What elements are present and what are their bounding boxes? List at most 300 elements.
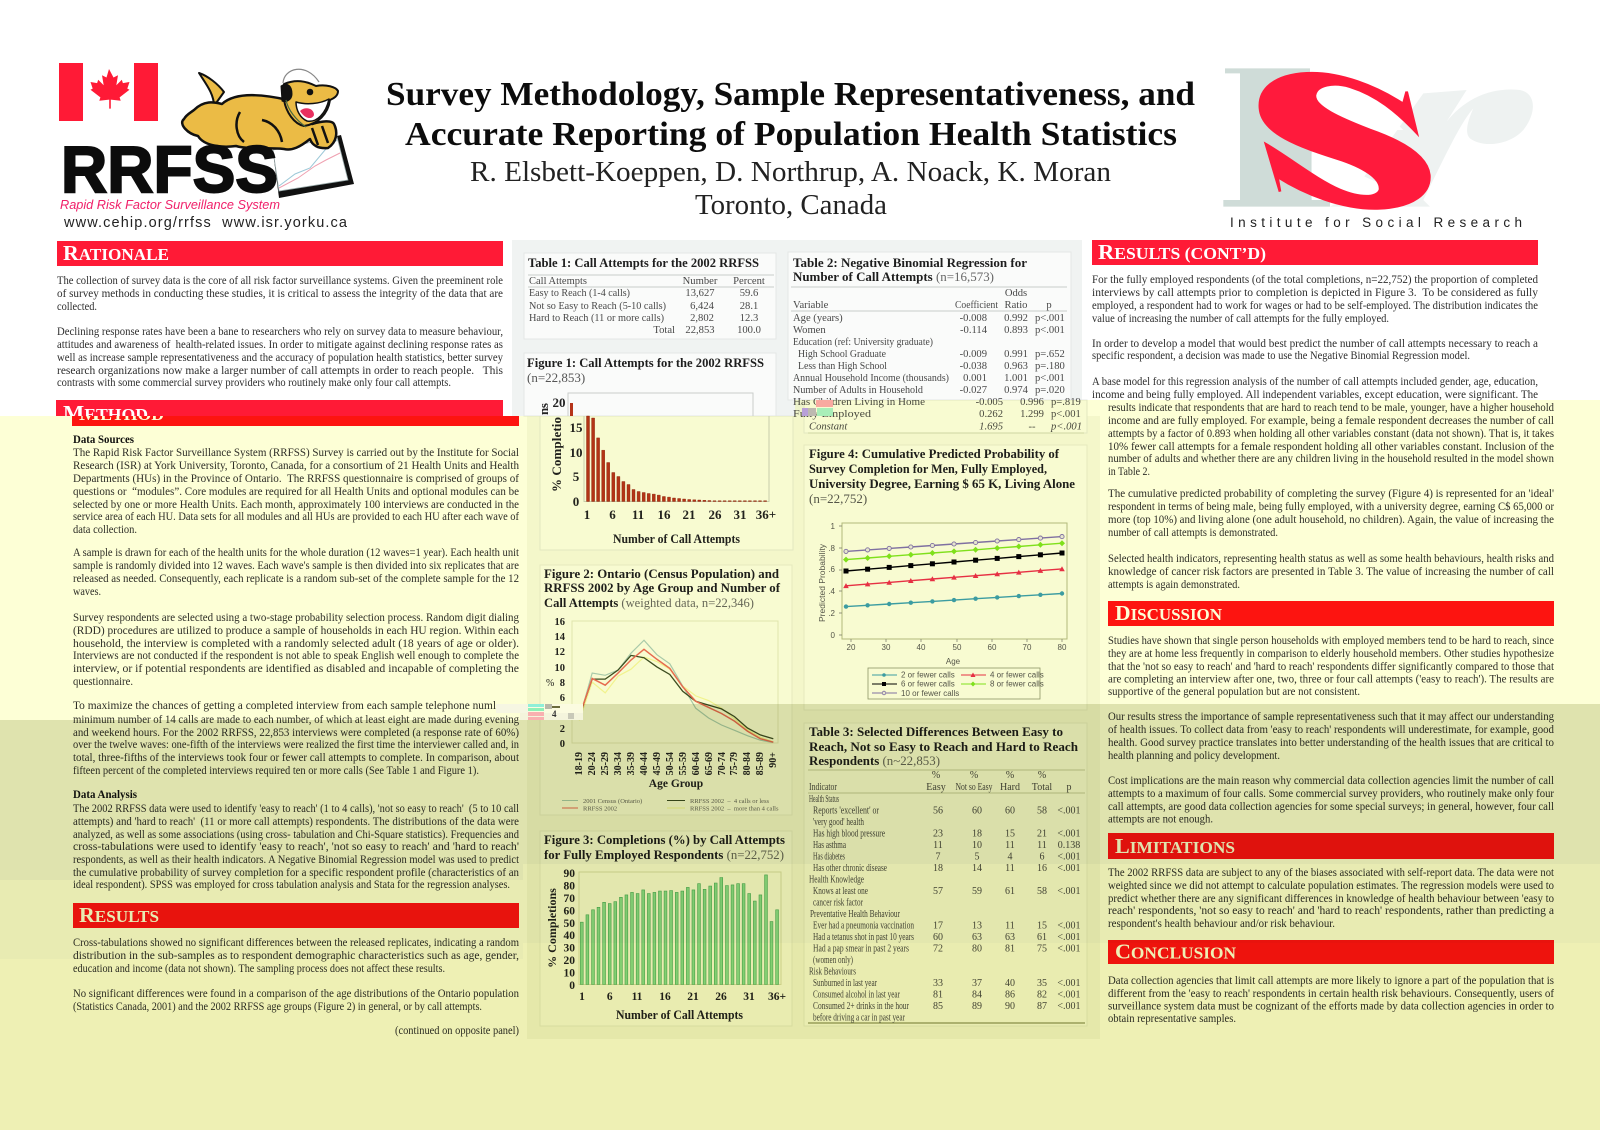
bar chart: call attempts: 5 <box>573 469 580 484</box>
figure 4 title: Survey Completion for Men, Fully Employed, <box>809 461 1047 476</box>
text block: results continued: in Table 2. <box>1108 466 1150 478</box>
table 3 data: Has diabetes <box>813 852 845 862</box>
table 2 subtitle: Number of Call Attempts (n=16,573) <box>793 269 994 284</box>
text block: results continued: specific respondent, a decision was made to use the Negative Binomial Regression model. <box>1092 350 1470 362</box>
line chart: predicted probability by age: 20 <box>847 643 856 652</box>
table 3 data: 85 <box>933 1001 943 1012</box>
text block: results continued: number of call attempts is demonstrated. <box>1108 527 1278 539</box>
chart legend: 6 or fewer calls <box>901 680 955 688</box>
table 3 data: 72 <box>933 944 943 954</box>
panel: center background, lower <box>527 416 1100 1039</box>
table 3 data: 10 <box>972 840 982 851</box>
table 3 data: <.001 <box>1057 886 1081 897</box>
heading: results continued: RESULTS (CONT’D) <box>1098 240 1266 264</box>
table 3 data: 58 <box>1037 806 1047 816</box>
bar chart: completions: 11 <box>632 991 643 1003</box>
chart legend <box>868 668 1044 699</box>
heading: rationale: RATIONALE <box>63 241 169 265</box>
bar chart: call attempts: 15 <box>570 420 583 435</box>
table 3 title: Reach, Not so Easy to Reach and Hard to Reach <box>809 739 1079 754</box>
bar chart: call attempts <box>536 393 776 546</box>
text block: discussion: attempts to a maximum of four calls. Some commercial survey providers, who routinely make only four <box>1108 788 1554 800</box>
heading: rationale <box>57 241 503 266</box>
text block: results continued: employed, a respondent had to work for wages or had to be self-employed. The distribution indicates the <box>1092 300 1538 312</box>
table 3 title: Respondents (n~22,853) <box>809 753 940 768</box>
table 1 data: 22,853 <box>685 325 715 336</box>
text block: results: Cross-tabulations showed no significant differences between the released replicates, indicating a random <box>73 937 519 949</box>
table 3 data: 18 <box>972 828 982 840</box>
table 2 data: 0.974 <box>1004 385 1029 396</box>
chart legend: 8 or fewer calls <box>990 680 1044 688</box>
table 3 data: % <box>932 770 940 781</box>
table 2 data: p<.001 <box>1035 325 1065 336</box>
table 3 data: Consumed alcohol in last year <box>813 990 900 1000</box>
table 3 data: 60 <box>972 806 982 816</box>
line chart: predicted probability by age: Predicted Probability <box>817 543 827 622</box>
text block: limitations: The 2002 RRFSS data are subject to any of the biases associated with self-report data. The data were not <box>1108 867 1555 879</box>
table 3 data: 5 <box>974 852 980 862</box>
text block: results continued: In order to develop a model that would best predict the number of call attempts necessary to reach a <box>1092 338 1538 350</box>
text block: data sources: A sample is drawn for each of the health units for the whole duration (12 waves=1 year). Each health unit <box>73 547 520 559</box>
table 3 title <box>809 724 1079 768</box>
text block: results: distribution in the sub-samples as to respondent demographic characteristics such as age, gender, <box>73 950 519 962</box>
bar chart: completions: 80 <box>564 880 575 892</box>
panel: conclusion <box>1108 940 1554 1025</box>
text block: data sources: total, three-fifths of the interviews took four or fewer call attempts to complete. In comparison, about <box>73 752 520 764</box>
text block: data analysis: ideal respondent). SPSS was employed for cross tabulation analysis and Stata for the regression analyses. <box>73 879 510 891</box>
chart legend: RRFSS 2002 – 4 calls or less <box>690 798 770 805</box>
heading: method: METHOD <box>79 401 164 425</box>
table 3 data: 15 <box>1005 828 1015 840</box>
bar chart: completions: 0 <box>569 980 575 992</box>
table 3 data: before driving a car in past year <box>813 1012 905 1024</box>
table 3 data: Health Status <box>809 794 839 805</box>
chart legend: 2 or fewer calls <box>901 670 955 680</box>
text block: data sources: data collection. <box>73 524 137 536</box>
line chart: age distribution: 50-54 <box>665 752 676 775</box>
figure 4 title: (n=22,752) <box>809 491 867 506</box>
table 3 data: <.001 <box>1057 944 1081 954</box>
panel: figure 1 <box>524 353 793 550</box>
table 1 data: 2,802 <box>690 313 714 324</box>
table 3 data: Consumed 2+ drinks in the hour <box>813 1001 909 1012</box>
table 2 data: Variable <box>793 300 829 311</box>
table 3 data: % <box>1006 770 1014 781</box>
chart legend: RRFSS 2002 <box>583 806 617 812</box>
icon: dog mascot <box>182 69 338 150</box>
table 1 data: 13,627 <box>685 288 715 299</box>
table 3 data: <.001 <box>1057 990 1081 1000</box>
line chart: age distribution: 6 <box>560 693 565 704</box>
text block: data sources: questionnaire. <box>73 676 133 688</box>
line chart: age distribution <box>546 617 779 812</box>
text block: data sources: To maximize the chances of getting a completed interview from each sample telephone numl <box>73 700 496 712</box>
line chart: predicted probability by age: .2 <box>828 609 836 618</box>
table 1 data: 12.3 <box>740 313 758 324</box>
bar chart: call attempts: 26 <box>708 507 722 522</box>
bar chart: completions: 20 <box>564 955 575 967</box>
table 3 data: 35 <box>1037 978 1047 989</box>
text block: discussion: that the 'not so easy to reach' and 'hard to reach' respondents differ significantly compared to those that <box>1108 661 1555 673</box>
table 3 data: 11 <box>1005 863 1015 874</box>
heading: discussion: DISCUSSION <box>1115 601 1222 625</box>
text block: conclusion <box>1108 975 1554 1025</box>
line chart: predicted probability by age: 40 <box>917 643 926 652</box>
bar chart: completions: 6 <box>607 991 613 1003</box>
table 2 data: -0.038 <box>960 361 987 372</box>
text block: results continued: Selected health indicators, representing health status as well as some health behaviours, health risks and <box>1108 553 1554 565</box>
line chart: age distribution: 60-64 <box>691 752 702 775</box>
table 3 data: 80 <box>972 944 982 954</box>
table 2 data: 0.893 <box>1004 325 1028 336</box>
logo tagline: Rapid Risk Factor Surveillance System <box>60 197 280 212</box>
text block: discussion: call attempts, are good data collection agencies for some special surveys; in general, however, four call <box>1108 801 1554 813</box>
line chart: predicted probability by age <box>817 522 1067 699</box>
title <box>386 76 1195 153</box>
bar chart: call attempts: 36+ <box>756 507 776 522</box>
text block: limitations: predict whether there are any significant differences in knowledge of health behaviour between 'easy to <box>1108 893 1554 905</box>
table 2 data: p=.652 <box>1035 349 1065 360</box>
text block: discussion: of health issues. To collect data from 'easy to reach' respondents will underestimate, for example, good <box>1108 724 1554 736</box>
bar chart: call attempts: 11 <box>632 507 644 522</box>
table 3 data: (women only) <box>813 955 853 966</box>
bar chart: completions: 50 <box>564 918 575 930</box>
table 3 title: Table 3: Selected Differences Between Easy to <box>809 724 1063 739</box>
table 3 data: Had a tetanus shot in past 10 years <box>813 932 914 943</box>
bar chart: completions: % Completions <box>545 888 559 968</box>
text block: data sources: Data Sources <box>73 434 135 446</box>
bar chart: completions: 60 <box>564 906 575 918</box>
line chart: predicted probability by age: .4 <box>828 587 836 596</box>
text block: rationale <box>57 275 503 389</box>
panel: center background, upper <box>512 240 1082 416</box>
table 3 data: <.001 <box>1057 978 1081 989</box>
table 2 data: p <box>1046 300 1052 311</box>
panel: limitations <box>1108 833 1555 930</box>
table 3 data: 11 <box>1037 840 1047 851</box>
table 2 data: -0.114 <box>960 325 988 336</box>
table 3 data: 63 <box>1005 932 1015 943</box>
figure 3 title: for Fully Employed Respondents (n=22,752) <box>544 847 784 862</box>
line chart: age distribution: 40-44 <box>639 752 650 775</box>
table 1 data: Call Attempts <box>529 276 587 287</box>
bar chart: call attempts: 1 <box>584 507 590 522</box>
panel: method <box>56 400 520 891</box>
logo: RRFSS with Canadian flag and dog <box>59 63 354 231</box>
panel: rationale <box>57 241 503 389</box>
line chart: predicted probability by age: 80 <box>1058 643 1067 652</box>
figure 2 title: RRFSS 2002 by Age Group and Number of <box>544 580 781 595</box>
figure 2 title <box>544 566 781 610</box>
table 3 data: Reports 'excellent' or <box>813 806 880 816</box>
line chart: age distribution: 20-24 <box>587 752 598 775</box>
panel: figure 4 <box>804 445 1087 710</box>
line chart: age distribution: 2 <box>560 724 565 735</box>
line chart: age distribution: 18-19 <box>574 752 585 775</box>
line chart: age distribution: 8 <box>560 678 565 689</box>
table 2 data: p<.001 <box>1035 313 1065 324</box>
table 1 data: 59.6 <box>740 288 758 299</box>
text block: data sources: Survey respondents are selected using a two-stage probability selection process. Random digit dialing <box>73 612 519 624</box>
table 3 data: cancer risk factor <box>813 898 863 908</box>
table 2 data: 0.991 <box>1004 349 1028 360</box>
bar chart: completions: 40 <box>564 930 575 942</box>
text block: results continued: income and are fully employed. For example, being a female respondent decreases the number of call <box>1108 415 1554 427</box>
table 3 data: <.001 <box>1057 920 1081 932</box>
table 3 data: 7 <box>936 852 940 862</box>
line chart: age distribution: 70-74 <box>717 752 728 775</box>
text block: rationale: of survey methods in conducting these studies, it is critical to assess the integrity of the data that are <box>57 288 503 300</box>
text block: results continued: attempts by a factor of 0.893 when holding all other variables constant (data not shown). That is, it takes <box>1108 428 1554 440</box>
table 3 data: Risk Behaviours <box>809 966 856 978</box>
text block: results continued <box>1092 274 1554 591</box>
bar chart: call attempts: 0 <box>573 494 579 509</box>
heading: results <box>73 903 519 928</box>
text block: discussion: Cost implications are the main reason why commercial data collection agencies limit the number of call <box>1108 775 1554 787</box>
authors and location: Toronto, Canada <box>695 189 887 221</box>
table 2 data: 0.001 <box>963 373 987 384</box>
heading: results continued <box>1092 240 1538 265</box>
table 3 data: 86 <box>1005 990 1015 1000</box>
table 2 data: -0.008 <box>960 313 987 324</box>
text block: data sources: sample is randomly divided into 12 waves. Each wave's sample is then divided into six replicates that are <box>73 560 519 572</box>
table 3 data: 13 <box>972 920 982 932</box>
text block: limitations <box>1108 867 1555 930</box>
line chart: predicted probability by age: 70 <box>1023 643 1032 652</box>
title: Survey Methodology, Sample Representativeness, and <box>386 76 1195 113</box>
table 2 data: p<.001 <box>1051 409 1081 420</box>
figure 2 title: Figure 2: Ontario (Census Population) and <box>544 566 780 581</box>
table 2 data: 1.695 <box>979 422 1003 432</box>
table 1 data: Hard to Reach (11 or more calls) <box>529 313 664 324</box>
table 3 data: Indicator <box>809 782 838 793</box>
table 3 data: 21 <box>1037 828 1047 840</box>
table 1 data: Not so Easy to Reach (5-10 calls) <box>529 301 666 312</box>
chart legend: RRFSS 2002 – more than 4 calls <box>690 806 779 812</box>
line chart: age distribution: % <box>546 678 554 689</box>
table 3 data: 61 <box>1037 932 1047 943</box>
table 2 data: Education (ref: University graduate) <box>793 337 933 348</box>
table 3 data: <.001 <box>1057 852 1081 862</box>
table 3 data: 60 <box>933 932 943 943</box>
table 2 data: -0.027 <box>960 385 987 396</box>
line chart: predicted probability by age: 1 <box>831 522 836 531</box>
text block: rationale: attitudes and awareness of health-related issues. In order to mitigate against declining response rates as <box>57 339 503 351</box>
figure 1 sample size: (n=22,853) <box>527 370 585 385</box>
panel: figure 2 <box>540 565 792 815</box>
text block: results continued: respondent in terms of being male, being fully employed, with a university degree, earning C$ 65,000 or <box>1108 501 1554 513</box>
table 3 data: Has other chronic disease <box>813 863 887 874</box>
table 3 data: <.001 <box>1057 828 1081 840</box>
table 2 title: Table 2: Negative Binomial Regression for <box>793 255 1027 270</box>
table 1 data: Easy to Reach (1-4 calls) <box>529 288 630 299</box>
bar chart: completions: 31 <box>743 991 755 1003</box>
table 3 data: Had a pap smear in past 2 years <box>813 944 909 954</box>
table 3 data: 11 <box>933 840 943 851</box>
table 3 data: 81 <box>1005 944 1015 954</box>
text block: data analysis: The 2002 RRFSS data were used to identify 'easy to reach' (1 to 4 calls), 'not so easy to reach' (5 to 10 call <box>73 803 519 815</box>
line chart: predicted probability by age: 60 <box>988 643 997 652</box>
text block: data analysis: the cumulative probability of survey completion for a specific respondent profile (characteristics of an <box>73 867 519 879</box>
bar chart: call attempts: 6 <box>609 507 616 522</box>
text block: results continued: value of increasing the number of call attempts for the fully employed. <box>1092 313 1389 325</box>
figure 4 title: University Degree, Earning $ 65 K, Living Alone <box>809 476 1075 491</box>
table 3 data: Health Knowledge <box>809 874 864 886</box>
text block: data sources: questions or “modules”. Core modules are required for all Health Units and optional modules can be <box>73 486 519 498</box>
table 3 data: Preventative Health Behaviour <box>810 909 900 920</box>
table 2 data: High School Graduate <box>798 349 886 360</box>
table 2 data <box>791 287 1084 433</box>
bar chart: completions: 10 <box>564 968 575 980</box>
text block: data analysis: cross-tabulations were used to identify 'easy to reach', 'not so easy to reach' and 'hard to reach' <box>73 841 519 853</box>
bar chart: call attempts: ns <box>536 403 551 415</box>
table 3 data: 59 <box>972 886 982 897</box>
website addresses: www.cehip.org/rrfss www.isr.yorku.ca <box>63 215 348 231</box>
heading: discussion <box>1108 601 1554 626</box>
table 3 data: 57 <box>933 886 943 897</box>
chart legend: 10 or fewer calls <box>901 689 959 698</box>
logo wordmark: RRFSS <box>61 132 278 206</box>
text block: results continued: results indicate that respondents that are hard to reach tend to be male, younger, have a higher household <box>1108 402 1554 414</box>
table 2 data: p=.020 <box>1035 385 1065 396</box>
heading: conclusion: CONCLUSION <box>1115 940 1236 964</box>
text block: data analysis: attempts) and 'hard to reach' (11 or more call attempts) respondents. The distributions of the data were <box>73 816 519 828</box>
bar chart: call attempts: 20 <box>552 395 566 410</box>
text block: results continued: For the fully employed respondents (of the total completions, n=22,752) the proportion of completed <box>1092 274 1538 286</box>
text block: data sources: interview, or if potential respondents are identified as disabled and incapable of completing the <box>73 663 519 675</box>
table 3 data: 60 <box>1005 806 1015 816</box>
table 2 data: p=.180 <box>1035 361 1065 372</box>
table 3 data: 18 <box>933 863 943 874</box>
table 2 data: Fully Employed <box>793 409 872 420</box>
table 2 data: p<.001 <box>1035 373 1065 384</box>
table 3 data: 11 <box>1005 840 1015 851</box>
table 3 data: % <box>970 770 978 781</box>
table 2 data: Coefficient <box>955 300 998 311</box>
text: 4 <box>552 709 557 719</box>
table 1 data: 6,424 <box>690 301 715 312</box>
text block: data sources <box>73 434 520 777</box>
text block: conclusion: obtain representative samples. <box>1108 1013 1236 1025</box>
text block: results continued: The cumulative predicted probability of completing the survey (Figure 4) is represented for an 'ideal' <box>1108 488 1554 500</box>
text block: limitations: reach' respondents, 'not so easy to reach' and 'hard to reach' respondents, rather than predicting a <box>1108 905 1554 917</box>
table 3 data: 11 <box>1005 920 1015 932</box>
table 3 data: Ever had a pneumonia vaccination <box>813 920 914 932</box>
table 3 data: <.001 <box>1057 806 1081 816</box>
table 3 data: 40 <box>1005 978 1015 989</box>
table 3 data: 16 <box>1037 863 1047 874</box>
table 1 data: Percent <box>733 276 765 287</box>
table 3 data: 33 <box>933 978 943 989</box>
text block: discussion: health. Good survey practice translates into better understanding of the health issues that are critical to <box>1108 737 1554 749</box>
text block: limitations: weighted since we did not attempt to calculate population estimates. The regression models were used to <box>1108 880 1554 892</box>
table 3 data: Has asthma <box>813 840 846 851</box>
line chart: predicted probability by age: 0 <box>831 631 836 640</box>
bar chart: completions: 30 <box>564 942 575 954</box>
bar chart: call attempts: 16 <box>658 507 671 522</box>
table 1 data: 100.0 <box>737 325 761 336</box>
table 3 data: 4 <box>1008 852 1012 862</box>
table 1 data: Number <box>683 276 718 287</box>
table 3 data: 56 <box>933 806 943 816</box>
line chart: age distribution: Age Group <box>649 778 703 790</box>
text block: discussion: are completing an interview after one, two, three or four call attempts ('easy to reach'). The results are <box>1108 674 1554 686</box>
bar chart: completions: 21 <box>687 991 699 1003</box>
panel: results continued <box>1092 240 1554 591</box>
text block: results continued: 10% fewer call attempts for a female respondent holding all other variables constant. Inclusion of the <box>1108 441 1554 453</box>
table 2 data: Less than High School <box>798 361 887 372</box>
table 3 data: Has high blood pressure <box>813 828 885 840</box>
text block: results: No significant differences were found in a comparison of the age distributions of the Ontario population <box>73 988 519 1000</box>
table 1 data: Total <box>653 325 675 336</box>
table 1 title: Table 1: Call Attempts for the 2002 RRFSS <box>528 255 759 270</box>
table 2 data: 1.001 <box>1004 373 1028 384</box>
text block: results continued: number of adults and whether there are any children living in the household resulted in the model shown <box>1108 453 1554 465</box>
table 2 data: 0.963 <box>1004 361 1028 372</box>
icon: Canadian flag <box>59 63 158 121</box>
line chart: age distribution: 25-29 <box>600 752 611 775</box>
text block: results: (continued on opposite panel) <box>395 1025 519 1037</box>
table 3 data: Total <box>1032 782 1052 793</box>
text block: discussion: supportive of the general population but are not consistent. <box>1108 686 1360 698</box>
bar chart: call attempts: 10 <box>570 445 582 460</box>
figure 4 title: Figure 4: Cumulative Predicted Probability of <box>809 446 1060 461</box>
table 2 data: Women <box>793 325 826 336</box>
table 3 data: 23 <box>933 828 943 840</box>
table 3 data: 75 <box>1037 944 1047 954</box>
table 1 data <box>528 275 774 336</box>
text block: data analysis: respondents, as well as their health indicators. A Negative Binomial Regression model was used to predict <box>73 854 520 866</box>
line chart: age distribution: 12 <box>554 647 565 658</box>
text block: data sources: (RDD) procedures are utilized to produce a sample of households in each HU region. Within each <box>73 625 519 637</box>
table 3 data: % <box>1038 770 1046 781</box>
text block: data sources: service area of each HU. Data sets for all modules and all HUs are provided to each HU after each wave of <box>73 511 519 523</box>
text block: data analysis: analyzed, as well as some associations (using cross- tabulation and Chi-Square statistics). Frequencies and <box>73 829 519 841</box>
text block: conclusion: different from the 'easy to reach' respondents in certain health risk behaviours. Consequently, users of <box>1108 988 1554 1000</box>
text block: data sources: minimum number of 14 calls are made to each number, of which at least eight are made during evening <box>73 714 519 726</box>
table 3 data: Hard <box>1000 782 1020 793</box>
text block: results: education and income (data not shown). The sampling process does not affect these results. <box>73 963 445 975</box>
line chart: age distribution: 30-34 <box>613 752 624 775</box>
line chart: predicted probability by age: 30 <box>882 643 891 652</box>
heading: method <box>56 400 519 426</box>
bar chart: completions: 36+ <box>768 991 786 1003</box>
bar chart: completions: Number of Call Attempts <box>616 1008 743 1022</box>
line chart: predicted probability by age: .8 <box>828 544 836 553</box>
table 3 data: <.001 <box>1057 863 1081 874</box>
text block: discussion: health planning and policy development. <box>1108 750 1280 762</box>
authors and location <box>470 156 1111 221</box>
title: Accurate Reporting of Population Health Statistics <box>405 116 1177 153</box>
table 2 data: Constant <box>809 422 848 432</box>
table 2 data: 0.262 <box>979 409 1003 420</box>
table 3 data <box>808 770 1085 1024</box>
text block: conclusion: surveillance system data must be cognizant of the efforts made by data collection agencies in order to <box>1108 1000 1554 1012</box>
panel: table 2 <box>788 252 1087 433</box>
table 3 data: 37 <box>972 978 982 989</box>
text block: rationale: contrasts with some commercial survey providers who routinely make only four call attempts. <box>57 377 451 389</box>
table 3 data: 82 <box>1037 990 1047 1000</box>
panel: discussion <box>1108 601 1555 826</box>
chart legend <box>562 798 779 812</box>
line chart: age distribution: 35-39 <box>626 752 637 775</box>
line chart: age distribution: 16 <box>554 617 565 628</box>
logo: Institute for Social Research: Institute for Social Research <box>1230 215 1522 230</box>
line chart: age distribution: 0 <box>560 739 565 750</box>
text block: discussion: they are at home less frequently in comparison to elderly household members. Other studies hypothesize <box>1108 648 1554 660</box>
table 3 data: 17 <box>933 920 943 932</box>
bar chart: call attempts: % Completio <box>549 417 564 492</box>
